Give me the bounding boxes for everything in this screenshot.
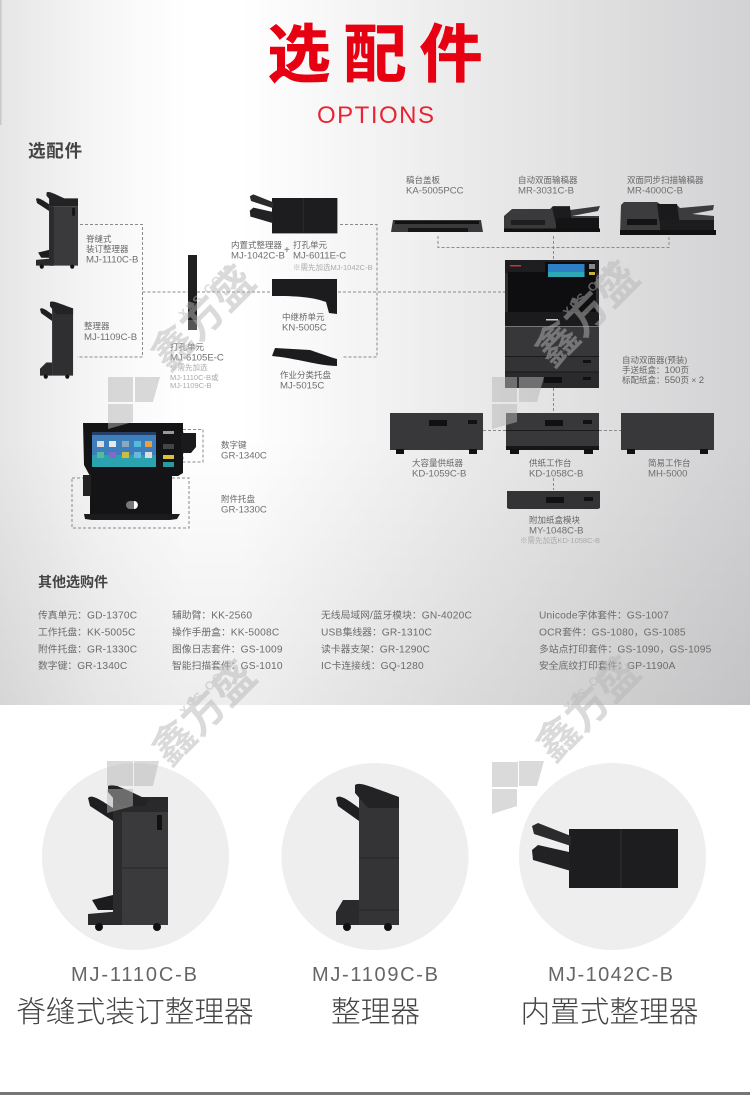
caption: MJ-1109C-B: [312, 964, 438, 1029]
text: inner finisher and punch label: 打孔单元: [293, 240, 328, 250]
list: other options column 3: USB集线器：GR-1310C: [321, 626, 432, 638]
text: additional paper cassette label: ※需先加选KD-1058C-B: [520, 535, 600, 545]
text: hole punch unit label: 打孔单元: [170, 342, 205, 352]
panel: product circle MJ-1110C-B: [42, 763, 229, 950]
watermark: bottom right: 鑫方盛: [527, 648, 649, 770]
text: reversing document feeder label: MR-3031C-B: [518, 186, 574, 196]
icon: bridge unit: [272, 279, 337, 314]
text: paper feed pedestal label: KD-1058C-B: [529, 468, 583, 480]
text: dual-scan document feeder label: 双面同步扫描输稿器: [627, 175, 704, 185]
icon: hole punch unit: [188, 255, 197, 330]
text: MJ-1110C-B label: 装订整理器: [86, 244, 129, 254]
watermark: bottom right: XFS.COM: [561, 656, 619, 714]
watermark: top left: XFS.COM: [176, 263, 234, 321]
list: other options column 1: 工作托盘：KK-5005C: [38, 626, 136, 638]
text: MJ-1110C-B label: [86, 234, 138, 266]
text: platen cover label: [406, 175, 464, 196]
icon: small saddle-stitch finisher: [36, 192, 78, 269]
text: additional paper cassette label: [520, 515, 600, 545]
text: inner finisher and punch label: MJ-1042C-B: [231, 250, 285, 262]
text: numeric keypad label: GR-1340C: [221, 450, 267, 462]
icon: platen cover: [391, 220, 483, 232]
list: other options column 3: IC卡连接线：GQ-1280: [321, 659, 424, 672]
list: other options column 2: [172, 608, 283, 672]
text: dual-scan document feeder label: [627, 175, 704, 196]
caption: MJ-1109C-B: MJ-1109C-B: [312, 964, 438, 986]
text: dual-scan document feeder label: MR-4000C-B: [627, 186, 683, 196]
text: simple stand label: 简易工作台: [648, 458, 691, 468]
list: other options column 4: OCR套件：GS-1080，GS-1085: [539, 626, 686, 638]
panel: product circle MJ-1042C-B: [519, 763, 706, 950]
list: other options column 4: 多站点打印套件：GS-1090，GS-1095: [539, 642, 712, 656]
caption: MJ-1109C-B: 整理器: [331, 996, 420, 1029]
caption: MJ-1110C-B: [16, 964, 254, 1029]
watermark: bottom left: XFS.COM: [177, 660, 235, 718]
text: additional paper cassette label: 附加纸盒模块: [529, 515, 581, 525]
icon: inner finisher small: [250, 194, 337, 233]
text: inner finisher and punch label: ※需先加选MJ-1042C-B: [293, 262, 373, 272]
text: printer spec note: 标配纸盒：550页 × 2: [622, 375, 704, 386]
icon: main printer: [505, 260, 599, 388]
watermark: top right: 鑫方盛: [526, 253, 648, 375]
list: other options column 2: 辅助臂：KK-2560: [172, 608, 252, 622]
list: other options column 2: 操作手册盒：KK-5008C: [172, 626, 279, 638]
watermark: bottom right: [492, 648, 649, 814]
watermark: bottom left: [107, 652, 265, 813]
list: other options column 2: 图像日志套件：GS-1009: [172, 642, 283, 656]
heading: other options: 其他选购件: [38, 574, 108, 590]
caption: MJ-1110C-B: 脊缝式装订整理器: [16, 996, 254, 1029]
text: hole punch unit label: ※需先加选: [170, 362, 208, 372]
list: other options column 4: Unicode字体套件：GS-1007: [539, 608, 669, 622]
list: other options column 4: 安全底纹打印套件：GP-1190A: [539, 659, 676, 672]
icon: small finisher: [40, 302, 73, 379]
list: other options column 1: 附件托盘：GR-1330C: [38, 642, 137, 656]
list: other options column 1: 数字键：GR-1340C: [38, 659, 127, 672]
text: printer spec note: [622, 355, 704, 386]
subtitle: OPTIONS: OPTIONS: [317, 102, 434, 129]
text: numeric keypad label: [221, 440, 267, 462]
caption: MJ-1042C-B: [520, 964, 699, 1029]
text: printer spec note: 自动双面器(预装): [622, 355, 687, 365]
text: hole punch unit label: MJ-1110C-B或: [170, 372, 219, 382]
text: paper feed pedestal label: [529, 458, 583, 480]
text: numeric keypad label: 数字键: [221, 440, 247, 450]
text: job separator tray label: 作业分类托盘: [280, 370, 332, 380]
text: platen cover label: 稿台盖板: [406, 175, 441, 185]
text: inner finisher and punch label: MJ-6011E-C: [293, 250, 346, 262]
text: MJ-1110C-B label: MJ-1110C-B: [86, 254, 138, 266]
list: other options column 4: [539, 608, 712, 672]
icon: job separator tray: [272, 348, 337, 366]
list: other options column 2: 智能扫描套件：GS-1010: [172, 659, 283, 672]
text: simple stand label: [648, 458, 691, 480]
watermark: bottom left: 鑫方盛: [143, 652, 265, 774]
text: paper feed pedestal label: 供纸工作台: [529, 458, 572, 468]
title: 选配件: [268, 20, 496, 90]
icon: dual-scan document feeder: [620, 202, 716, 235]
icon: control panel with keypad and tray: [83, 423, 196, 520]
text: accessory tray label: 附件托盘: [221, 494, 256, 504]
caption: MJ-1110C-B: MJ-1110C-B: [71, 964, 197, 986]
text: reversing document feeder label: [518, 175, 578, 196]
text: hole punch unit label: MJ-1109C-B: [170, 381, 212, 390]
text: MJ-1110C-B label: 脊缝式: [86, 234, 112, 244]
text: inner finisher and punch label: [231, 240, 373, 272]
text: job separator tray label: [280, 370, 332, 392]
list: other options column 3: [321, 608, 472, 672]
text: MJ-1109C-B label: [84, 321, 137, 343]
text: large capacity feeder label: [412, 458, 466, 480]
text: platen cover label: KA-5005PCC: [406, 186, 464, 196]
caption: MJ-1042C-B: 内置式整理器: [520, 996, 699, 1029]
icon: paper feed pedestal: [506, 413, 599, 454]
text: reversing document feeder label: 自动双面输稿器: [518, 175, 578, 185]
text: inner finisher and punch label: +: [284, 245, 290, 256]
text: inner finisher and punch label: 内置式整理器: [231, 240, 283, 250]
text: MJ-1109C-B label: 整理器: [84, 321, 110, 331]
list: other options column 3: 无线局域网/蓝牙模块：GN-4020C: [321, 608, 472, 622]
text: hole punch unit label: MJ-6105E-C: [170, 352, 224, 364]
list: other options column 1: [38, 608, 137, 672]
text: additional paper cassette label: MY-1048C-B: [529, 526, 584, 536]
watermark: top right: [492, 253, 648, 429]
text: MJ-1109C-B label: MJ-1109C-B: [84, 332, 137, 343]
watermark: top left: [108, 257, 264, 429]
text: hole punch unit label: [170, 342, 224, 390]
connector lines: [72, 224, 669, 528]
icon: large capacity feeder: [390, 413, 483, 454]
text: job separator tray label: MJ-5015C: [280, 380, 324, 392]
section heading: options: 选配件: [28, 141, 83, 161]
text: accessory tray label: [221, 494, 267, 516]
watermark: top left: 鑫方盛: [142, 257, 264, 379]
text: bridge unit label: [282, 312, 327, 334]
watermark: top right: XFS.COM: [560, 261, 618, 319]
icon: additional paper cassette: [507, 491, 600, 509]
text: large capacity feeder label: KD-1059C-B: [412, 468, 466, 480]
caption: MJ-1042C-B: MJ-1042C-B: [548, 964, 673, 986]
icon: reversing document feeder: [504, 206, 600, 232]
panel: product circle MJ-1109C-B: [282, 763, 468, 950]
icon: simple stand: [621, 413, 714, 454]
text: printer spec note: 手送纸盒：100页: [622, 365, 689, 376]
text: accessory tray label: GR-1330C: [221, 504, 267, 516]
text: simple stand label: MH-5000: [648, 468, 687, 480]
text: bridge unit label: KN-5005C: [282, 322, 327, 334]
text: bridge unit label: 中继桥单元: [282, 312, 325, 322]
text: large capacity feeder label: 大容量供纸器: [412, 458, 464, 468]
list: other options column 3: 读卡器支架：GR-1290C: [321, 642, 430, 656]
list: other options column 1: 传真单元：GD-1370C: [38, 608, 137, 622]
